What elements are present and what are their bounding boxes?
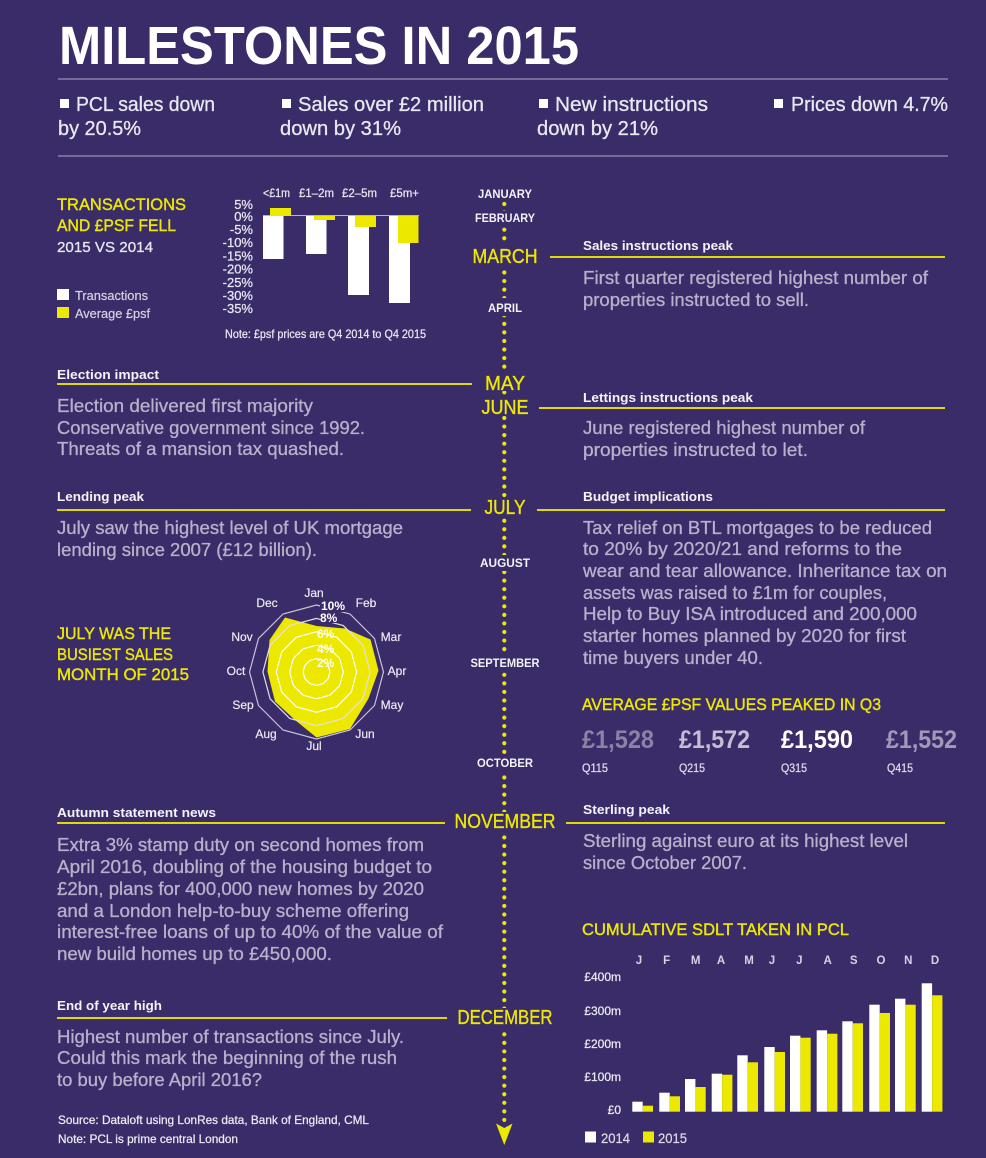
legend: SDLT chart: 2015 [658, 1130, 687, 1146]
bar chart: cumulative SDLT: M [744, 955, 754, 967]
bar chart: transactions and average psf: -30% [223, 288, 253, 303]
bar chart: cumulative SDLT: A [717, 955, 725, 967]
panel: budget implications: Tax relief on BTL mortgages to be reduced [583, 518, 932, 538]
panel: end of year high: End of year high [57, 998, 162, 1013]
panel: autumn statement news: Extra 3% stamp duty on second homes from [57, 835, 424, 855]
heading: cumulative SDLT: CUMULATIVE SDLT TAKEN IN PCL [582, 920, 849, 939]
panel: average psf values [582, 695, 957, 775]
heading: transactions and psf: TRANSACTIONS [57, 195, 186, 214]
heading: transactions and psf: 2015 VS 2014 [57, 239, 153, 256]
timeline month labels: AUGUST [480, 556, 531, 570]
bar chart: cumulative SDLT: J [769, 955, 775, 967]
panel: lettings instructions peak [539, 390, 945, 460]
panel: end of year high: to buy before April 2016? [57, 1070, 262, 1090]
bar chart: cumulative SDLT [584, 955, 942, 1117]
value: Q3 [781, 726, 853, 775]
panel: sales instructions peak: First quarter registered highest number of [583, 268, 929, 288]
panel: autumn statement news: interest-free loans of up to 40% of the value of [57, 922, 444, 942]
panel: budget implications: Budget implications [583, 489, 713, 504]
panel: autumn statement news: new build homes up to £450,000. [57, 944, 332, 964]
radar chart: monthly sales share: Apr [388, 664, 406, 678]
panel: sterling peak: Sterling peak [583, 802, 671, 817]
panel: lettings instructions peak: Lettings instructions peak [583, 390, 754, 405]
panel: budget implications [537, 489, 947, 668]
panel: budget implications: to 20% by 2020/21 and reforms to the [583, 539, 902, 559]
bar chart: transactions and average psf: 5% [234, 197, 253, 212]
stat: new instructions: down by 21% [537, 118, 658, 140]
heading: busiest sales month: BUSIEST SALES [57, 645, 173, 664]
legend: SDLT chart [585, 1130, 687, 1146]
panel: election impact: Election impact [57, 367, 160, 382]
panel: sterling peak: Sterling against euro at its highest level [583, 831, 908, 851]
bar chart: cumulative SDLT: £100m [584, 1070, 621, 1084]
legend: transactions chart [57, 288, 150, 321]
timeline month labels: FEBRUARY [475, 211, 535, 225]
value: Q2: £1,572 [679, 726, 750, 754]
value: Q4 [886, 726, 957, 775]
panel: sterling peak [566, 802, 945, 873]
stat: sales over 2 million: down by 31% [280, 118, 401, 140]
timeline dotted arrow [496, 204, 512, 1145]
timeline month labels: MAY [485, 373, 525, 395]
timeline month labels: JUNE [482, 397, 528, 419]
bar chart: transactions and average psf: 0% [234, 209, 253, 224]
bar chart: transactions and average psf: -25% [223, 275, 253, 290]
bar chart: cumulative SDLT: F [663, 955, 670, 967]
timeline month labels [454, 186, 557, 1029]
bar chart: cumulative SDLT: A [824, 955, 832, 967]
bar chart: transactions and average psf: £5m+ [390, 186, 419, 200]
headline stats [58, 94, 948, 140]
panel: sales instructions peak: Sales instructions peak [583, 238, 734, 253]
radar chart: monthly sales share: Oct [227, 664, 246, 678]
panel: autumn statement news: and a London help-to-buy scheme offering [57, 901, 409, 921]
panel: sales instructions peak [550, 238, 945, 310]
bar chart: cumulative SDLT: J [796, 955, 803, 967]
panel: budget implications: starter homes planned by 2020 for first [583, 626, 906, 646]
panel: sales instructions peak: properties instructed to sell. [583, 290, 809, 310]
panel: lending peak [57, 489, 471, 560]
panel: end of year high: Could this mark the beginning of the rush [57, 1048, 397, 1068]
stat: PCL sales: by 20.5% [58, 118, 141, 140]
bar chart: cumulative SDLT: N [904, 955, 912, 967]
radar chart: monthly sales share: Mar [381, 630, 401, 644]
radar chart: monthly sales share: Jun [355, 727, 375, 741]
bar chart: cumulative SDLT: £300m [584, 1004, 621, 1018]
panel: budget implications: Help to Buy ISA introduced and 200,000 [583, 604, 917, 624]
bar chart: transactions and average psf: -15% [223, 248, 253, 264]
bar chart: cumulative SDLT: O [877, 955, 886, 967]
stat: new instructions: New instructions [555, 94, 708, 116]
bar chart: transactions and average psf: -10% [223, 235, 253, 250]
panel: budget implications: wear and tear allowance. Inheritance tax on [582, 561, 947, 581]
value: Q4: Q415 [887, 763, 913, 775]
source note: Note: PCL is prime central London [58, 1132, 238, 1146]
radar chart: monthly sales share: 6% [317, 627, 335, 641]
panel: lending peak: July saw the highest level of UK mortgage [57, 518, 403, 538]
heading: busiest sales month: MONTH OF 2015 [57, 665, 189, 684]
value: Q1: Q115 [582, 763, 608, 775]
stat: new instructions [537, 94, 708, 140]
bar chart: cumulative SDLT: J [636, 955, 642, 967]
radar chart: monthly sales share: Aug [255, 727, 277, 741]
bar chart: cumulative SDLT: D [931, 955, 939, 967]
radar chart: monthly sales share: Dec [256, 596, 278, 610]
bar chart: transactions and average psf: <£1m [263, 186, 290, 200]
stat: sales over 2 million [280, 94, 484, 140]
panel: end of year high: Highest number of transactions since July. [57, 1027, 404, 1047]
timeline month labels: MARCH [472, 246, 538, 268]
stat: PCL sales: PCL sales down [76, 94, 215, 116]
timeline month labels: JANUARY [478, 187, 532, 201]
legend: transactions chart: Transactions [75, 288, 148, 303]
chart note: Note: £psf prices are Q4 2014 to Q4 2015 [225, 327, 426, 341]
heading: busiest sales month: JULY WAS THE [57, 624, 171, 643]
timeline month labels: DECEMBER [458, 1007, 552, 1029]
heading: busiest sales month [57, 624, 189, 684]
panel: average psf values: AVERAGE £PSF VALUES PEAKED IN Q3 [582, 695, 881, 714]
panel: autumn statement news: Autumn statement news [57, 805, 216, 820]
timeline month labels: APRIL [488, 301, 522, 315]
bar chart: transactions and average psf [223, 186, 419, 316]
panel: autumn statement news [57, 805, 445, 964]
panel: autumn statement news: April 2016, doubling of the housing budget to [57, 857, 432, 877]
radar chart: monthly sales share: Jul [306, 739, 322, 753]
value: Q2 [679, 726, 750, 775]
radar chart: monthly sales share: 2% [317, 656, 335, 670]
panel: lettings instructions peak: June registered highest number of [583, 418, 866, 438]
radar chart: monthly sales share: 8% [320, 611, 338, 625]
panel: end of year high [57, 998, 447, 1090]
panel: election impact: Threats of a mansion tax quashed. [57, 439, 344, 459]
value: Q3: £1,590 [781, 726, 853, 754]
radar chart: monthly sales share: 10% [321, 599, 345, 613]
panel: autumn statement news: £2bn, plans for 400,000 new homes by 2020 [57, 879, 424, 899]
panel: lending peak: lending since 2007 (£12 billion). [57, 540, 317, 560]
panel: budget implications: time buyers under 40. [583, 648, 763, 668]
bar chart: cumulative SDLT: S [850, 955, 858, 967]
radar chart: monthly sales share: 4% [317, 642, 335, 656]
legend: SDLT chart: 2014 [601, 1130, 630, 1146]
panel: lending peak: Lending peak [57, 489, 145, 504]
title: MILESTONES IN 2015 [59, 16, 579, 76]
bar chart: transactions and average psf: £2–5m [342, 186, 377, 200]
radar chart: monthly sales share: May [381, 698, 403, 712]
value: Q2: Q215 [679, 763, 705, 775]
heading: transactions and psf [57, 195, 186, 256]
radar chart: monthly sales share: Nov [231, 630, 253, 644]
value: Q1 [582, 726, 654, 775]
panel: election impact [57, 367, 472, 459]
panel: budget implications: assets was raised to £1m for couples, [583, 583, 887, 603]
value: Q3: Q315 [781, 763, 807, 775]
radar chart: monthly sales share: Jan [304, 586, 324, 600]
stat: sales over 2 million: Sales over £2 million [298, 94, 484, 116]
bar chart: cumulative SDLT: £0 [608, 1103, 621, 1117]
panel: lettings instructions peak: properties instructed to let. [583, 440, 808, 460]
timeline month labels: NOVEMBER [454, 811, 556, 833]
panel: election impact: Conservative government since 1992. [57, 418, 365, 438]
source note: Source: Dataloft using LonRes data, Bank of England, CML [58, 1113, 369, 1127]
bar chart: transactions and average psf: -20% [223, 262, 253, 276]
heading: transactions and psf: AND £PSF FELL [57, 216, 176, 235]
panel: election impact: Election delivered first majority [57, 396, 313, 416]
stat: PCL sales [58, 94, 215, 140]
bar chart: cumulative SDLT: £400m [584, 970, 621, 984]
timeline month labels: OCTOBER [477, 756, 533, 770]
legend: transactions chart: Average £psf [75, 306, 150, 321]
stat: prices: Prices down 4.7% [791, 94, 948, 116]
bar chart: cumulative SDLT: M [691, 955, 700, 967]
timeline month labels: JULY [484, 497, 526, 519]
radar chart: monthly sales share [227, 586, 406, 753]
value: Q4: £1,552 [886, 726, 957, 754]
bar chart: transactions and average psf: £1–2m [299, 186, 334, 200]
timeline month labels: SEPTEMBER [470, 656, 540, 670]
bar chart: transactions and average psf: -5% [230, 222, 253, 237]
radar chart: monthly sales share: Sep [232, 698, 254, 712]
panel: sterling peak: since October 2007. [583, 853, 747, 873]
value: Q1: £1,528 [582, 726, 654, 754]
radar chart: monthly sales share: Feb [356, 596, 377, 610]
bar chart: cumulative SDLT: £200m [584, 1037, 621, 1051]
bar chart: transactions and average psf: -35% [223, 301, 253, 316]
source note [58, 1113, 369, 1146]
